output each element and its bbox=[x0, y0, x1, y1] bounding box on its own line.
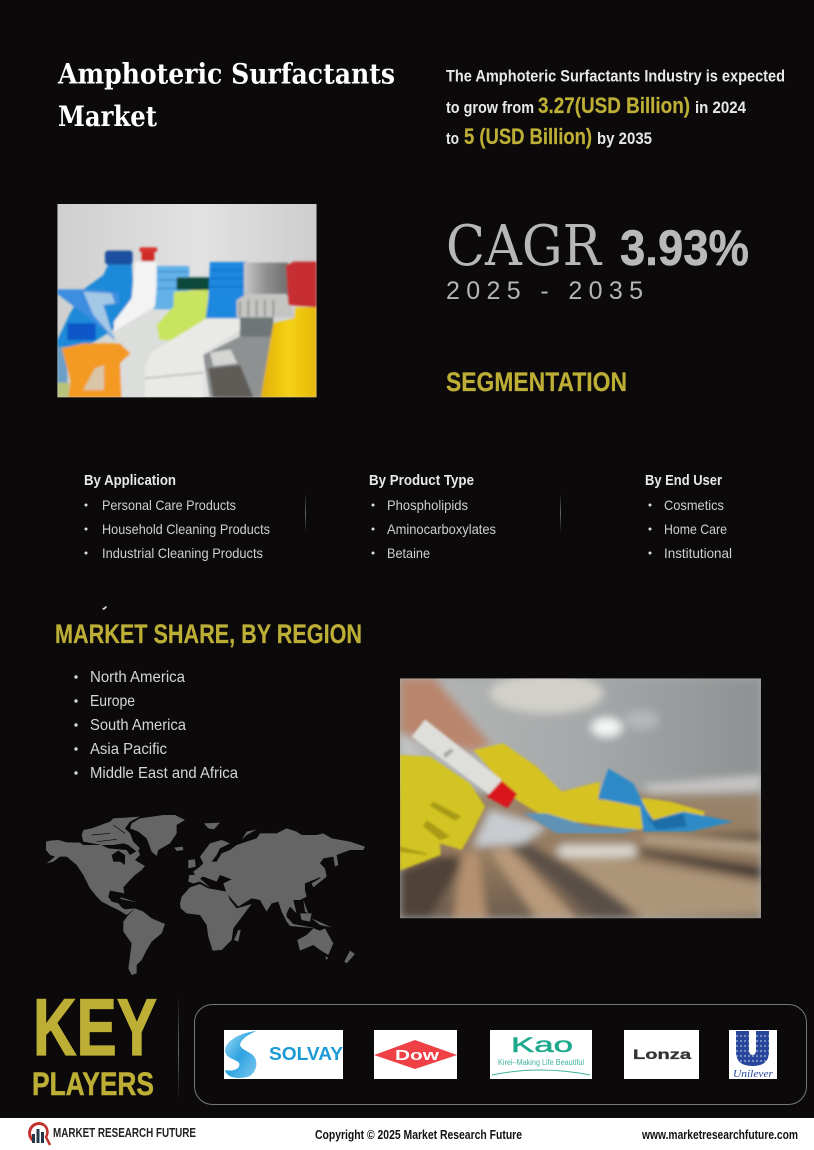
segment column: by application: Household Cleaning Products bbox=[102, 521, 270, 537]
market forecast statement: 3.27(USD Billion) bbox=[538, 93, 690, 118]
logo: unilever bbox=[729, 1030, 777, 1080]
segment column: by application: Personal Care Products bbox=[102, 497, 236, 513]
market forecast statement: in 2024 bbox=[695, 99, 747, 117]
key players panel bbox=[194, 1004, 806, 1104]
british isles bbox=[188, 859, 196, 868]
logo: unilever: Unilever bbox=[733, 1069, 773, 1080]
logo: dow bbox=[374, 1030, 457, 1079]
CAGR figure: 3.93% bbox=[620, 220, 749, 276]
title: Amphoteric Surfactants bbox=[57, 58, 395, 90]
world map bbox=[46, 815, 365, 975]
region list: Europe bbox=[90, 693, 135, 710]
CAGR figure bbox=[446, 214, 749, 305]
borneo bbox=[300, 913, 312, 922]
segment column: by end user: By End User bbox=[645, 472, 722, 489]
market forecast statement bbox=[446, 68, 785, 149]
tasmania bbox=[325, 957, 328, 960]
segment column: by end user: Home Care bbox=[664, 521, 727, 537]
market forecast statement: to grow from bbox=[446, 99, 534, 117]
heading: market share by region: MARKET SHARE, BY REGION bbox=[55, 619, 362, 649]
heading: segmentation: SEGMENTATION bbox=[446, 367, 627, 397]
segment column: by product type: By Product Type bbox=[369, 472, 474, 489]
segment column: by end user: Institutional bbox=[664, 545, 732, 561]
logo: solvay: SOLVAY bbox=[269, 1043, 344, 1064]
footer bbox=[0, 1118, 814, 1150]
segment column: by application: Industrial Cleaning Products bbox=[102, 545, 263, 561]
greenland bbox=[130, 815, 185, 856]
australia bbox=[297, 928, 333, 955]
logo: kao: Kirei–Making Life Beautiful bbox=[498, 1058, 584, 1067]
philippines bbox=[303, 900, 308, 913]
region list: Middle East and Africa bbox=[90, 765, 238, 782]
segment column: by product type: Betaine bbox=[387, 545, 430, 561]
region list bbox=[74, 669, 238, 782]
footer: MARKET RESEARCH FUTURE bbox=[53, 1125, 196, 1140]
africa bbox=[180, 884, 252, 951]
segment column: by product type: Aminocarboxylates bbox=[387, 521, 496, 537]
heading: key players bbox=[32, 983, 157, 1102]
canadian arctic bbox=[82, 817, 140, 852]
logo: kao: Kao bbox=[511, 1034, 573, 1057]
segment column: by end user bbox=[645, 472, 732, 561]
region list: Asia Pacific bbox=[90, 741, 167, 758]
new zealand bbox=[344, 951, 355, 963]
segment column: by application bbox=[84, 472, 270, 561]
segment column: by application: By Application bbox=[84, 472, 176, 489]
japan bbox=[312, 868, 327, 887]
photo: cleaning product bottles bbox=[57, 204, 317, 397]
title bbox=[57, 58, 395, 133]
novaya zemlya bbox=[242, 829, 257, 840]
heading: key players: PLAYERS bbox=[32, 1066, 154, 1102]
footer: Copyright © 2025 Market Research Future bbox=[315, 1127, 522, 1142]
north america bbox=[46, 840, 145, 915]
logo: lonza bbox=[624, 1030, 699, 1079]
segment column: by product type: Phospholipids bbox=[387, 497, 468, 513]
logo: lonza: Lonza bbox=[633, 1046, 691, 1062]
logo: dow: Dow bbox=[395, 1047, 439, 1064]
market forecast statement: by 2035 bbox=[597, 130, 652, 148]
new guinea bbox=[312, 918, 332, 927]
madagascar bbox=[234, 930, 241, 942]
CAGR figure: CAGR bbox=[446, 214, 603, 279]
logo: kao bbox=[490, 1030, 592, 1079]
icon: market research future logo bbox=[30, 1124, 50, 1145]
market forecast statement: to bbox=[446, 130, 459, 148]
south america bbox=[123, 908, 165, 975]
hudson bay bbox=[112, 851, 125, 865]
iceland bbox=[174, 847, 183, 851]
segment column: by end user: Cosmetics bbox=[664, 497, 724, 513]
sumatra and java bbox=[282, 912, 317, 928]
eurasia bbox=[188, 828, 365, 920]
cuba bbox=[121, 897, 136, 902]
title: Market bbox=[58, 100, 157, 133]
heading: key players: KEY bbox=[33, 983, 157, 1073]
market forecast statement: 5 (USD Billion) bbox=[464, 124, 592, 149]
region list: North America bbox=[90, 669, 185, 686]
region list: South America bbox=[90, 717, 186, 734]
CAGR figure: 2025 - 2035 bbox=[446, 277, 643, 305]
arctic channels bbox=[92, 825, 125, 842]
photo: gloved hands cleaning with spray bbox=[400, 673, 761, 918]
segment column: by product type bbox=[369, 472, 496, 561]
logo: solvay bbox=[224, 1030, 344, 1079]
svalbard bbox=[204, 823, 220, 829]
